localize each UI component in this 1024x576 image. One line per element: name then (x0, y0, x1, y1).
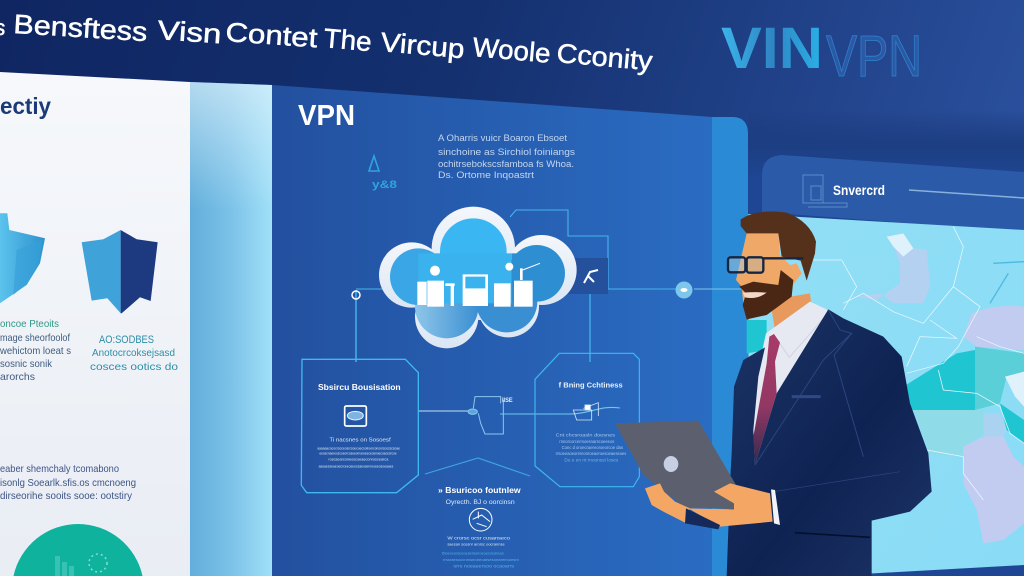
title: Bensftess (13, 9, 148, 47)
text block: rrssraesoccnmseoeeoarsesoeareeocesrn (443, 557, 519, 562)
title: Visn (157, 15, 223, 49)
text block: VPN intro: Ds. Ortome Inqoastrt (438, 170, 535, 180)
text block: right benefit: AO:SODBES (99, 334, 154, 346)
text block: right benefit (90, 334, 178, 373)
icon: small arrow mark: y&8 (372, 179, 397, 191)
text block: rnnorcorcerrsoesnarscoeeeos (559, 439, 614, 444)
panel: left white security panel (0, 72, 190, 576)
laptop (615, 421, 736, 509)
pale islands (887, 233, 1024, 407)
icon: teal circle (14, 524, 142, 576)
text block: lower left (0, 464, 136, 502)
panel: right node box (535, 353, 639, 487)
person with laptop (615, 211, 932, 576)
panel: central blue VPN panel (272, 85, 748, 576)
text block: Ti nacsnes on Sosoesf (329, 438, 391, 444)
tie (753, 334, 780, 465)
text block: eeoscnaereoscoeorcoseeomaroeeceosnoecoeoscrcoe (319, 451, 397, 456)
text block: left benefit: sosnic sonik (0, 359, 53, 370)
text block: left benefit (0, 318, 71, 383)
heading: VPN: VPN (298, 100, 355, 132)
face (736, 232, 802, 303)
icon: central shield outline: llSE (502, 397, 513, 404)
header bar (762, 155, 1024, 232)
text block: lower left: dirseorihe sooits sooe: ootstiry (0, 491, 133, 502)
text block: VPN intro: A Oharris vuicr Boaron Ebsoet (438, 133, 568, 143)
text block: left benefit: wehictom loeat s (0, 346, 71, 357)
icon: central shield outline (468, 397, 513, 434)
lapel lines (755, 310, 900, 537)
routes (813, 227, 1024, 500)
panel: bottom node text (438, 485, 521, 568)
icon: servers in cloud (417, 263, 540, 307)
text block: left benefit: arorchs (0, 372, 35, 383)
icon: device sketch (573, 403, 598, 420)
text block: saesan scesnr arorsc oocrannse (447, 543, 505, 547)
icon: cloud (379, 207, 577, 348)
panel: light blue strip (190, 82, 272, 576)
map (747, 214, 1024, 573)
connector lines (356, 210, 748, 476)
icon: header server sketch (803, 175, 847, 207)
icon: small arrow mark (369, 156, 397, 191)
heading: map: Snvercrd (833, 182, 885, 198)
icon: two-tone shield (82, 230, 158, 313)
text block (442, 536, 519, 568)
panel: map screen (747, 110, 1024, 576)
teal regions (747, 320, 1024, 443)
icon: dark square with arrows (568, 258, 608, 294)
icon: globe badge (469, 508, 492, 531)
heading: Sbsircu Bousisation (318, 382, 401, 392)
title: Cconity (555, 38, 654, 76)
text block: VPN intro (438, 133, 576, 180)
panel: left node box (301, 359, 418, 493)
shirt (751, 302, 829, 438)
logo: VPN: VPN (826, 24, 922, 89)
text block: aasaesseaeoecrceeoseocsaeosenreoeeosoeaaes (319, 463, 393, 468)
text block: roscsearconeoscoeaeconroscearca (328, 456, 389, 461)
panel: bottom node text: Oyrecth. BJ o oorcinsn (446, 500, 515, 506)
text block: Cnt chcsroasln doesnes (556, 432, 616, 438)
logo: VPN (721, 16, 922, 89)
text block: rrsoeeaoeorereonroeaeroesoeaeseoes (556, 451, 626, 456)
hair (741, 211, 816, 281)
text block: Dtoeocorsceoeserasnoeoecosareas (442, 551, 504, 556)
text block: VPN intro: sinchoine as Sirchiol foiniangs (438, 147, 576, 157)
cuffs (685, 489, 780, 529)
title: Vircup (379, 27, 466, 64)
text block: W crorsc ocsr cusanseco (447, 536, 510, 542)
text block (317, 438, 401, 468)
text block: lower left: isonlg Soearlk.sfis.os cmcnoeng (0, 478, 136, 489)
title: Woole (471, 32, 552, 69)
text block: left benefit: oncoe Pteoits (0, 318, 59, 330)
lavender regions (853, 237, 1024, 543)
light blue side edge (712, 117, 748, 576)
title (0, 9, 654, 76)
title: The (322, 23, 373, 57)
text block: left benefit: mage sheorfoolof (0, 333, 70, 344)
text block: orrs noeaeersoo ocaoarrs (453, 563, 514, 568)
text block: Conc d oroecraereoroeorcoe das (562, 445, 623, 450)
icon: blue shield left (0, 213, 45, 303)
suit jacket (727, 309, 932, 576)
title: Contet (225, 17, 319, 53)
hands (645, 483, 773, 527)
text block: right benefit: cosces ootics do (90, 362, 178, 373)
icon: right node (676, 282, 692, 298)
glasses (728, 257, 803, 273)
collar fold (773, 314, 827, 357)
icon: left node (352, 291, 360, 299)
neck (770, 293, 813, 340)
text block: lower left: eaber shemchaly tcomabono (0, 464, 119, 475)
text block: right benefit: Anotocrcoksejsasd (92, 348, 175, 359)
heading: security: ectiy (0, 93, 51, 119)
logo: VPN: VIN (721, 16, 823, 81)
beard (739, 270, 793, 319)
text block (556, 432, 626, 462)
heading: » Bsuricoo foutnlew (438, 485, 521, 495)
text block: aaaaaacococrcoceosrcsoocoecsoiroerconsorcoscscsoae (317, 445, 401, 450)
text block: Du e en nt rnoonsst loses (564, 457, 618, 462)
text block: VPN intro: ochitrsebokscsfamboa fs Whoa. (438, 159, 574, 169)
heading: f Bning Cchtiness (559, 380, 623, 389)
icon: eye device (345, 406, 366, 426)
